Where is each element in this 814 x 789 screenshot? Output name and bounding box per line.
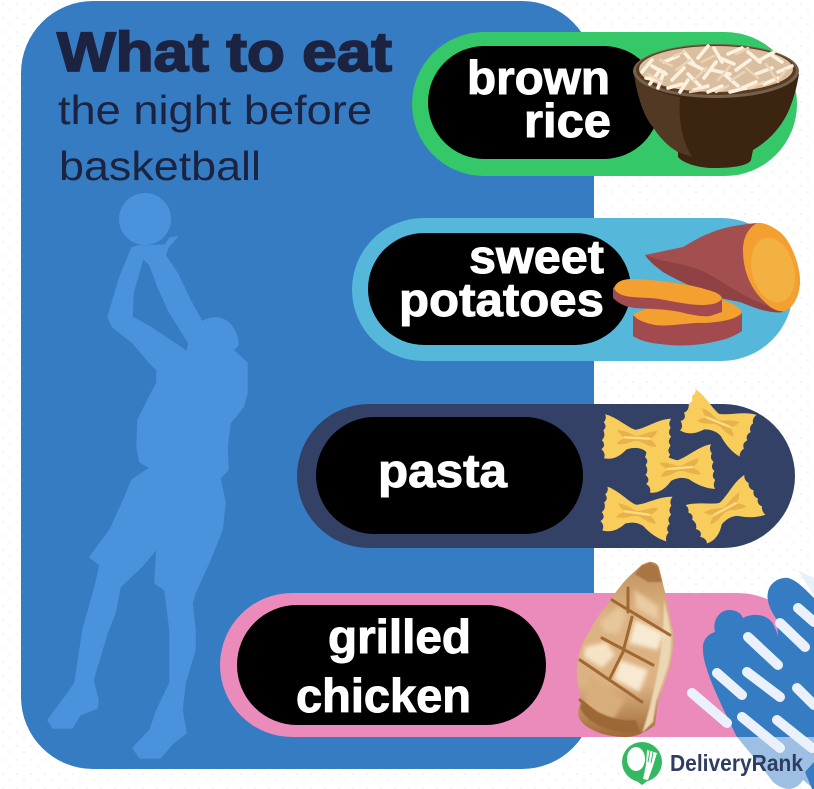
title xyxy=(57,20,392,189)
label: pasta: pasta xyxy=(378,444,508,497)
label: grilled chicken xyxy=(296,610,471,722)
label: grilled chicken: grilled xyxy=(328,610,471,663)
panel: brown rice xyxy=(412,32,799,176)
slice upper xyxy=(613,281,722,316)
panel: sweet potatoes xyxy=(352,218,801,361)
panel: grilled chicken xyxy=(220,562,810,737)
label: sweet potatoes: potatoes xyxy=(399,273,604,326)
slice lower xyxy=(633,303,742,345)
icon: bowl of rice xyxy=(633,44,799,168)
heading: What to eat: What to eat xyxy=(57,20,392,83)
decoration: blue brush hand xyxy=(692,570,814,789)
subheading line 2: basketball xyxy=(59,143,261,189)
panel: pasta xyxy=(297,388,795,548)
panel: blue background xyxy=(21,1,594,769)
label: sweet potatoes: sweet xyxy=(469,230,604,283)
subheading line 1: the night before xyxy=(58,87,372,133)
icon: green pin with fork and spoon xyxy=(622,742,662,785)
label: brown rice: rice xyxy=(524,94,611,147)
logo: DeliveryRank xyxy=(622,742,803,785)
icon: farfalle pasta xyxy=(599,388,766,547)
label: brown rice: brown xyxy=(467,51,610,104)
wordmark: DeliveryRank xyxy=(670,750,803,776)
illustration: basketball player silhouette xyxy=(48,193,247,758)
icon: grilled chicken breast xyxy=(577,562,673,737)
label: brown rice xyxy=(467,51,611,147)
label: grilled chicken: chicken xyxy=(296,669,471,722)
label: sweet potatoes xyxy=(399,230,604,326)
icon: sweet potato xyxy=(613,223,801,345)
